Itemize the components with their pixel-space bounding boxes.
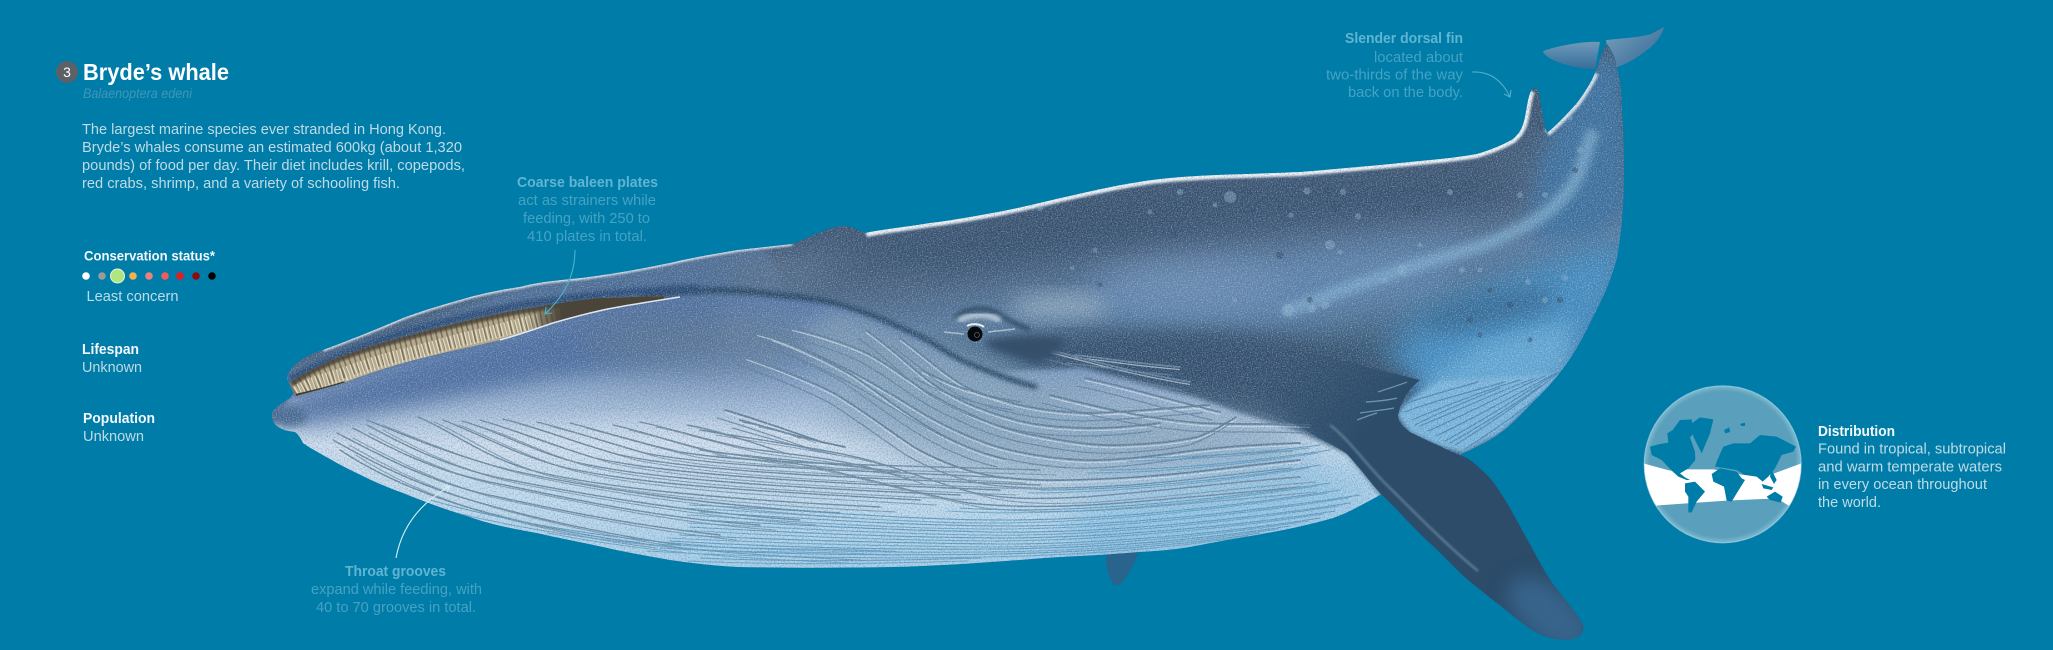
grain texture [260,20,1640,580]
back dark top [800,165,1530,285]
dark band eye to flipper [1036,318,1428,422]
belly blue [1060,455,1400,570]
population: Population [83,410,155,427]
chin dark tip [268,405,308,427]
title: Bryde’s whale [83,59,229,85]
arrow: throat grooves [396,486,450,558]
splash-spots [1037,116,1583,362]
head grey [770,254,842,290]
whale illustration [260,20,1664,650]
callout: baleen plates: 410 plates in total. [527,228,647,245]
grey cheek [580,312,820,368]
callout: throat grooves [311,563,482,616]
intro paragraph: Bryde’s whales consume an estimated 600kg (about 1,320 [82,139,462,156]
number badge [56,61,78,83]
cheek under eye [802,309,1008,370]
callout: dorsal fin: back on the body. [1348,84,1463,101]
intro paragraph: The largest marine species ever stranded in Hong Kong. [82,121,446,138]
callout: dorsal fin [1326,30,1464,101]
population: Unknown [83,428,144,445]
distribution text [1818,423,2006,511]
scientific name: Balaenoptera edeni [83,85,193,101]
upper jaw dark line [290,288,700,380]
throat grooves, lower left [333,417,1316,550]
rear lower blue [1380,240,1640,440]
status scale dots [82,269,216,283]
distribution text: in every ocean throughout [1818,476,1988,493]
lower jaw navy shading [285,298,720,425]
population [83,410,155,445]
throat grooves, upper [717,328,1310,488]
throat blue-grey shading [820,350,1300,480]
lifespan: Lifespan [82,341,139,358]
rear dark blob [1418,280,1562,340]
distribution text: Distribution [1818,423,1895,440]
creases [1357,382,1407,420]
flipper light leading edge [1330,425,1478,571]
callout: baleen plates: Coarse baleen plates [517,174,658,191]
back white edge [866,91,1531,233]
callout: throat grooves: expand while feeding, with [311,581,482,598]
number badge: 3 [63,64,71,80]
intro paragraph: red crabs, shrimp, and a variety of schooling fish. [82,175,400,192]
conservation status: Conservation status* [84,248,216,264]
tail flukes [1543,27,1664,69]
callout: baleen plates: act as strainers while [518,192,656,209]
title block [56,59,229,101]
eye [944,309,1065,363]
flank mid blue [1080,240,1470,330]
baleen plates [290,296,665,396]
lifespan: Unknown [82,359,142,376]
rear belly grooves [1404,370,1562,449]
pale patch behind eye [1010,293,1110,319]
pale streak [1283,130,1593,312]
throat grooves, highlight [725,330,1310,483]
continents [1650,417,1796,512]
flipper tip shading [1504,572,1584,640]
small far-side flipper [1106,550,1139,585]
upper jaw shading [280,245,790,385]
callout: baleen plates [517,174,658,245]
callout: dorsal fin: Slender dorsal fin [1345,30,1463,47]
throat grooves, lower [418,445,1360,564]
whale body [272,44,1624,568]
callout: baleen plates: feeding, with 250 to [523,210,650,227]
conservation status [82,248,216,305]
callout: throat grooves: Throat grooves [345,563,446,580]
distribution map [1643,386,1803,543]
pectoral flipper [1258,354,1584,640]
arrow: dorsal fin [1472,72,1511,97]
tail stock [1530,50,1630,240]
tail ridge white edge [1547,73,1595,133]
callout: throat grooves: 40 to 70 grooves in total. [316,599,476,616]
lifespan [82,341,142,376]
intro paragraph [82,121,465,192]
rear grooved patch [1398,367,1567,453]
distribution text: the world. [1818,494,1881,511]
rear bright blue [1422,318,1577,394]
dorsal white edge [323,244,792,350]
callout: dorsal fin: located about [1374,49,1464,66]
callout: dorsal fin: two-thirds of the way [1326,66,1463,84]
distribution text: and warm temperate waters [1818,458,2002,476]
distribution text: Found in tropical, subtropical [1818,440,2006,458]
distribution band [1643,463,1803,506]
intro paragraph: pounds) of food per day. Their diet includes krill, copepods, [82,157,465,174]
arrow: baleen plates [545,250,575,314]
ventral pouch [274,294,1382,568]
mouth line shadow [640,290,1037,387]
lower lip highlight [500,297,680,340]
throat pale [508,420,770,440]
conservation status: Least concern [86,288,178,305]
